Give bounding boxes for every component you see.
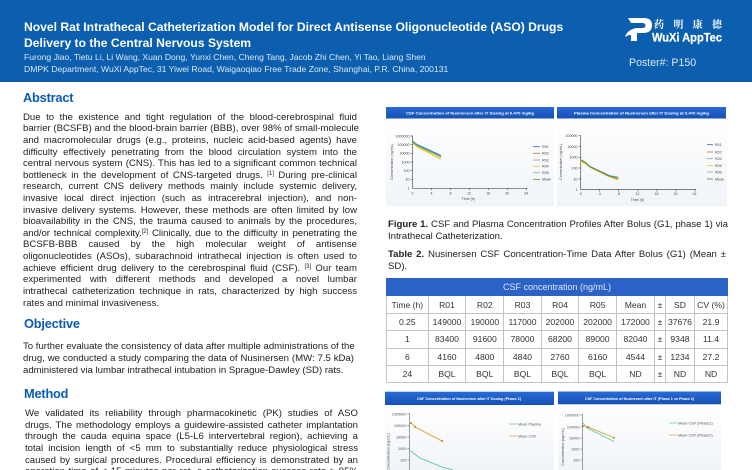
data lines: [582, 423, 615, 442]
table: CSF concentration: ND: [705, 369, 717, 379]
table: CSF concentration: CSF concentration (ng/mL): [503, 282, 611, 292]
text block: abstract: Due to the existence and tight regulation of the blood-cerebrospinal fluid: [23, 112, 357, 123]
table: CSF concentration: Time (h): [392, 300, 423, 310]
table: CSF concentration: R04: [552, 300, 568, 310]
text block: abstract: and macromolecular drugs (e.g., proteins, nucleic acid-based agents) have: [23, 135, 357, 146]
table: CSF concentration: Mean: [625, 300, 646, 310]
text block: abstract: difficulty effectively penetrating from the blood circulation system into the: [23, 146, 357, 158]
table: CSF concentration: 11.4: [703, 334, 719, 344]
axis labels: 10000: [569, 436, 580, 440]
poster title: Novel Rat Intrathecal Catheterization Model for Direct Antisense Oligonucleotide (ASO) Drugs: [24, 20, 563, 34]
legend: Mean CSF (Phase1): [678, 421, 713, 425]
table: CSF concentration: 4840: [513, 352, 532, 362]
figure 1 caption: Intrathecal Catheterization.: [388, 230, 503, 242]
axis labels: 100: [404, 169, 410, 173]
table 2 caption: SD).: [388, 261, 407, 272]
axis labels: 10000: [396, 435, 406, 439]
legend: R02: [715, 150, 722, 154]
legend: [533, 145, 551, 182]
table: CSF concentration: ±: [658, 317, 662, 327]
axis labels: [561, 413, 580, 466]
axis labels: [390, 134, 528, 201]
table: CSF concentration: BQL: [589, 369, 606, 379]
table: CSF concentration: 24: [403, 369, 412, 379]
axis labels: Concentration (ng/mL): [390, 144, 394, 180]
axis labels: 16: [654, 192, 658, 196]
table: CSF concentration: BQL: [438, 369, 456, 379]
axis labels: 8: [450, 191, 452, 195]
text block: method: through the cauda equina space (L5-L6 intervertebral region), achieving a: [25, 431, 358, 442]
text block: objective: drug, we conducted a study comparing the data of Nusinersen (MW: 7.5 kDa): [23, 353, 354, 364]
text block: abstract: BCSFB-BBB caused by the high molecular weight of antisense: [23, 239, 357, 250]
axis labels: Time (h): [631, 198, 644, 202]
table: CSF concentration: 89000: [586, 334, 610, 344]
table: CSF concentration: ND: [629, 369, 642, 379]
axis labels: 24: [524, 191, 528, 195]
table: CSF concentration: 37676: [668, 317, 692, 327]
table: CSF concentration: 4544: [626, 352, 645, 362]
table: CSF concentration: 0.25: [399, 317, 416, 327]
table: CSF concentration: R05: [590, 300, 605, 310]
axis labels: 4: [599, 192, 601, 196]
text block: abstract: [23, 112, 359, 308]
header banner: [0, 0, 752, 82]
icon: company logo: [625, 16, 723, 44]
axis labels: 100000: [566, 134, 578, 138]
legend: Mean CSF: [518, 434, 537, 438]
text block: abstract: achieve efficient drug delivery to the cerebrospinal fluid (CSF). [3] Our team: [23, 263, 357, 274]
table: CSF concentration: R03: [515, 300, 530, 310]
axis labels: 1000000: [392, 412, 406, 416]
data lines: [412, 141, 441, 159]
legend: R04: [542, 165, 549, 169]
poster title: [24, 20, 563, 50]
heading: abstract: Abstract: [23, 90, 73, 105]
table 2 caption: Table 2. Nusinersen CSF Concentration-Time Data After Bolus (G1) (Mean ±: [388, 249, 726, 260]
axes: [579, 136, 696, 192]
axis labels: 10000: [568, 145, 578, 149]
table: CSF concentration: 68200: [548, 334, 572, 344]
chart header: [385, 392, 554, 405]
table: CSF concentration: 91600: [473, 334, 497, 344]
table: CSF concentration: 4160: [437, 352, 457, 362]
icon: company logo: 药 明 康 德: [654, 16, 723, 31]
legend: R03: [715, 157, 722, 161]
text block: abstract: invasive delivery systems. However, these methods are often limited by low: [23, 205, 357, 216]
axis labels: 1000: [402, 160, 410, 164]
axis labels: 10: [406, 178, 410, 182]
table: CSF concentration: 202000: [583, 317, 612, 327]
table: CSF concentration: 78000: [511, 334, 534, 344]
table: CSF concentration: R01: [439, 300, 455, 310]
text block: objective: [23, 341, 355, 376]
axis labels: Concentration (ng/mL): [559, 144, 563, 180]
chart header: [386, 107, 554, 118]
data lines: [410, 422, 453, 470]
table: CSF concentration: 6160: [588, 352, 607, 362]
chart: CSF phase 1 versus phase 2: [558, 392, 721, 470]
table: CSF concentration: 149000: [433, 317, 461, 327]
table: CSF concentration: SD: [674, 300, 686, 310]
axis labels: 100000: [567, 425, 580, 429]
table: CSF concentration: 83400: [435, 334, 459, 344]
text block: abstract: bioavailability in the CNS, the trauma caused to animals by the procedures,: [23, 216, 357, 227]
table: CSF concentration: ND: [674, 369, 686, 379]
table: CSF concentration: 27.2: [703, 352, 719, 362]
axes: [580, 414, 582, 470]
legend: R02: [542, 152, 549, 156]
table 2 caption: [388, 249, 726, 272]
text block: abstract: research, current CNS delivery methods mainly include systemic delivery,: [23, 181, 357, 192]
axis labels: 1000: [570, 156, 578, 160]
table: CSF concentration: CV (%): [697, 300, 725, 310]
table: CSF concentration: ±: [658, 334, 662, 344]
axis labels: 100: [572, 166, 578, 170]
legend: R05: [542, 171, 549, 175]
authors: Furong Jiao, Tietu Li, Li Wang, Xuan Dong, Yunxi Chen, Cheng Tang, Jacob Zhi Chen, Yi Tao, Liang Shen: [24, 52, 426, 62]
icon: company logo: WuXi AppTec: [652, 32, 723, 44]
chart: plasma concentration at 0.470 mg/kg: [557, 107, 727, 206]
axis labels: 4: [430, 191, 432, 195]
text block: method: drugs. The methodology employs a guidewire-assisted catheter implantation: [25, 420, 358, 430]
affiliation: DMPK Department, WuXi AppTec, 31 Yiwei Road, Waigaoqiao Free Trade Zone, Shanghai, P.R. China, 200131: [24, 64, 448, 74]
table: CSF concentration: BQL: [551, 369, 569, 379]
table: CSF concentration: 6: [405, 352, 410, 362]
axis labels: 12: [636, 192, 640, 196]
axis labels: [559, 134, 696, 202]
table: CSF concentration: 172000: [621, 317, 650, 327]
axis labels: 1: [576, 188, 578, 192]
heading: method: Method: [24, 386, 68, 401]
table: CSF concentration: 1: [405, 334, 410, 344]
axis labels: Concentration (ng/mL): [386, 432, 390, 470]
legend: Mean Plasma: [518, 422, 542, 426]
table: CSF concentration: ±: [658, 352, 662, 362]
table: CSF concentration: BQL: [476, 369, 493, 379]
poster number: Poster#: P150: [629, 57, 696, 69]
text block: method: total incision length of <5 mm to substantially reduce physiological stress: [25, 443, 358, 454]
axis labels: 0: [580, 192, 582, 196]
axis labels: Time (h): [462, 197, 475, 201]
text block: abstract: rates and minimal invasiveness.: [23, 298, 159, 308]
table: CSF concentration: 4800: [475, 352, 494, 362]
legend: R04: [715, 164, 722, 168]
text block: method: We validated its reliability through pharmacokinetic (PK) studies of ASO: [25, 408, 358, 419]
axis labels: 20: [505, 191, 509, 195]
table: CSF concentration: 202000: [546, 317, 574, 327]
legend: R05: [715, 170, 722, 174]
chart header: CSF Concentration of Nusinersen after IT Dosing (Phase 1): [417, 397, 522, 401]
axis labels: 1: [408, 186, 410, 190]
chart header: CSF Concentration of Nusinersen after IT (Phase 1 vs Phase 2): [585, 397, 695, 401]
axis labels: 1000: [571, 447, 580, 451]
chart: CSF concentration at 0.470 mg/kg: [386, 107, 554, 206]
table: CSF concentration: 1234: [670, 352, 690, 362]
chart header: Plasma Concentration of Nusinersen after IT Dosing at 0.470 mg/kg: [574, 110, 710, 116]
table: CSF concentration: 190000: [470, 317, 499, 327]
table: CSF concentration: 117000: [508, 317, 536, 327]
axis labels: Concentration (ng/mL): [561, 427, 565, 466]
axis labels: [386, 412, 406, 470]
legend: Mean CSF (Phase2): [678, 433, 713, 437]
table: CSF concentration: [386, 278, 728, 383]
chart header: CSF Concentration of Nusinersen after IT Dosing at 0.470 mg/kg: [406, 110, 535, 116]
legend: [669, 421, 713, 437]
table: CSF concentration: ±: [658, 300, 662, 310]
axis labels: 20: [674, 192, 678, 196]
chart header: [557, 107, 726, 118]
axis labels: 100: [400, 458, 406, 462]
data lines: [581, 160, 618, 180]
axes: [410, 136, 527, 190]
legend: R01: [542, 145, 549, 149]
table: CSF concentration: R02: [477, 300, 493, 310]
axis labels: 1000000: [565, 413, 580, 417]
axis labels: 1000000: [396, 134, 410, 138]
legend: R03: [542, 158, 549, 162]
text block: abstract: oligonucleotides (ASOs), subarachnoid intrathecal injection is often used to: [23, 251, 357, 262]
table: CSF concentration: 9348: [670, 334, 690, 344]
axis labels: 1000: [398, 447, 406, 451]
axis labels: 100000: [398, 143, 410, 147]
figure 1 caption: Figure 1. CSF and Plasma Concentration Profiles After Bolus (G1, phase 1) via: [388, 219, 728, 230]
axis labels: 24: [692, 192, 696, 196]
axis labels: 8: [618, 192, 620, 196]
legend: Mean: [542, 178, 551, 182]
table: CSF concentration: ±: [658, 369, 662, 379]
axes: [408, 413, 410, 470]
legend: [707, 143, 724, 181]
table: CSF concentration: 2760: [550, 352, 570, 362]
axis labels: 16: [486, 191, 490, 195]
text block: abstract: barrier (BCSFB) and the blood-brain barrier (BBB), over 98% of small-molecule: [23, 123, 359, 134]
axis labels: 12: [467, 191, 471, 195]
text block: method: [25, 408, 358, 470]
chart header: [558, 392, 721, 404]
text block: method: caused by surgical procedures. Procedural efficiency is demonstrated by an: [25, 454, 358, 466]
axis labels: 100: [573, 458, 580, 462]
text block: abstract: bottleneck in the development of CNS-targeted drugs. [1] During pre-clinical: [23, 170, 357, 181]
heading: objective: Objective: [24, 316, 80, 331]
text block: abstract: and/or technical complexity.[2] Clinically, due to the difficulty in penetrating the: [23, 228, 357, 239]
text block: abstract: invasive local direct injection (such as intracerebral injection), and non-: [23, 193, 357, 204]
figure 1 caption: [388, 219, 728, 242]
text block: abstract: central nervous system (CNS). This has led to a significant common technical: [23, 158, 357, 169]
table: CSF concentration: 21.9: [703, 317, 719, 327]
text block: abstract: experimented with different methods and developed a novel lumbar: [23, 274, 357, 285]
axis labels: 10: [574, 177, 578, 181]
text block: objective: administered via lumbar intrathecal intubation in Sprague-Dawley (SD) rats.: [23, 365, 343, 376]
legend: R01: [715, 143, 722, 147]
poster title: Delivery to the Central Nervous System: [24, 36, 251, 50]
text block: objective: To further evaluate the consistency of data after multiple administrations of the: [23, 341, 355, 352]
legend: Mean: [715, 177, 724, 181]
table: CSF concentration: BQL: [514, 369, 531, 379]
chart: CSF and plasma, phase 1: [385, 392, 554, 470]
table: CSF concentration: 82040: [624, 334, 647, 344]
axis labels: 100000: [394, 424, 406, 428]
text block: abstract: intrathecal catheterization technique in rats, characterized by high success: [23, 286, 357, 297]
axis labels: 10000: [400, 152, 410, 156]
axis labels: 0: [412, 191, 414, 195]
legend: [509, 422, 542, 438]
